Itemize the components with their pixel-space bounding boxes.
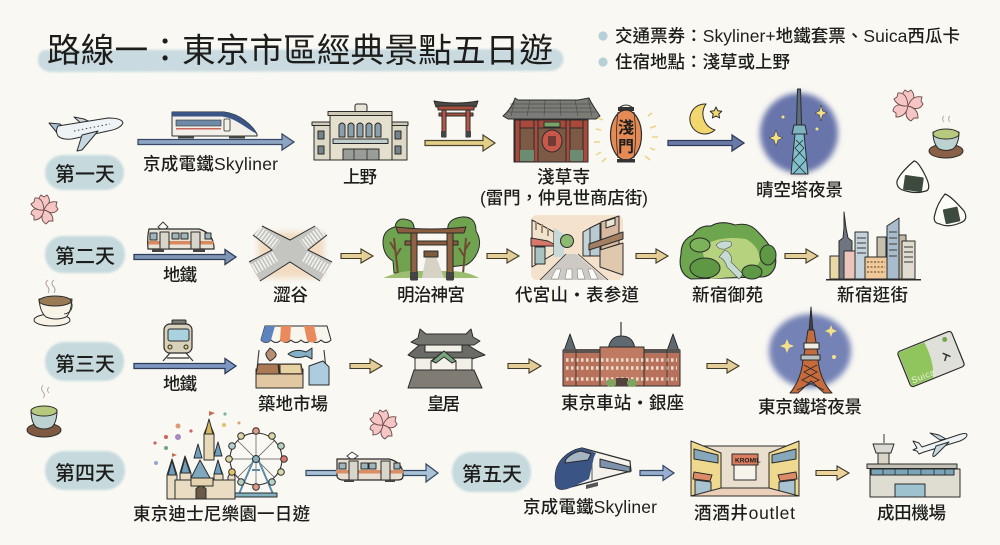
icon: airplane departing [913,433,967,456]
icon: Tokyo Skytree at night [760,89,838,174]
icon: green tea cup left [27,385,61,437]
icon: commuter train day 2 [148,222,214,252]
arrow: Skyliner to outlet [640,466,674,480]
arrow: day 3 metro [134,358,236,374]
day label: 第二天 [45,236,125,273]
day label: 第一天 [45,155,124,190]
arrow: Gyoen to Shinjuku [785,249,818,263]
icon: crescent moon and star [690,104,722,134]
label: 淺草寺: (雷門，仲見世商店街) [480,188,648,208]
icon: Kaminarimon gate [503,98,600,162]
day label: 第三天: 第三天 [55,353,115,376]
info list: 住宿地點：淺草或上野 [615,52,790,72]
label: 成田機場: 成田機場 [877,503,946,523]
icon: onigiri [897,161,929,192]
arrow: Tokyo Station to Tower [707,359,739,373]
arrow: day 2 metro [134,250,236,264]
icon: Ueno station [312,104,408,160]
icon: cherry blossom top right [893,90,923,121]
arrow: Daikanyama to Gyoen [636,249,668,263]
label: 淺草寺 [480,167,648,208]
arrow: airport to Ueno [138,134,294,150]
icon: Shisui outlet mall: KROMIL [735,458,761,464]
arrow: Tsukiji to Palace [350,359,382,373]
label: 地鐵 day 2: 地鐵 [163,265,198,285]
icon: cherry blossom centre [370,410,397,439]
day label: 第四天 [45,451,125,490]
icon: Shisui outlet mall [691,441,799,496]
icon: Tokyo Tower at night [769,307,851,393]
icon: torii gate [434,101,478,137]
label: 澀谷: 澀谷 [273,285,308,305]
label: 酒酒井outlet: 酒酒井outlet [694,503,795,523]
icon: Imperial Palace [408,329,485,388]
icon: green tea cup top right [929,116,963,158]
icon: commuter train day 4 [336,452,403,482]
day label: 第五天 [452,452,531,492]
day label: 第五天: 第五天 [462,463,522,486]
arrow: Ueno to Asakusa [425,135,495,151]
icon: Meiji shrine [383,217,480,280]
icon: onigiri with sesame [934,194,966,226]
arrow: Palace to Tokyo Station [508,359,541,373]
info list [598,26,960,72]
icon: Shinjuku Gyoen park [680,223,776,279]
icon: ferris wheel [226,428,287,497]
day label: 第一天: 第一天 [55,163,115,186]
label: 京成電鐵Skyliner day 5: 京成電鐵Skyliner [523,497,657,517]
label: 東京車站・銀座: 東京車站・銀座 [561,393,684,413]
label: 地鐵 day 3: 地鐵 [163,374,198,394]
arrow: Meiji to Daikanyama [487,249,519,263]
label: 明治神宮: 明治神宮 [397,285,465,305]
icon: Suica card: Suica [910,367,937,385]
label: 上野: 上野 [343,167,378,187]
icon: Skyliner train [172,112,257,138]
label: 東京鐵塔夜景: 東京鐵塔夜景 [758,397,862,417]
icon: Skyliner train front [555,448,631,489]
icon: red lantern: 門 [618,138,634,156]
icon: Suica card [897,331,965,387]
label: 晴空塔夜景: 晴空塔夜景 [756,180,843,200]
label: 皇居: 皇居 [427,394,460,414]
icon: Shibuya crossing [249,226,332,281]
icon: cherry blossom left [31,195,58,224]
arrow: Asakusa to Skytree [668,135,744,151]
icon: red lantern: 淺 [618,118,634,137]
icon: airplane day 1 [49,117,123,151]
day label: 第三天 [45,342,124,381]
arrow: Shibuya to Meiji [341,249,373,263]
label: 京成電鐵Skyliner: 京成電鐵Skyliner [143,154,278,174]
info list: 交通票券：Skyliner+地鐵套票、Suica西瓜卡 [615,26,960,46]
label: 淺草寺: 淺草寺 [537,167,590,187]
icon: Tsukiji market stall [256,326,331,388]
arrow: outlet to Narita [816,466,849,480]
icon: Tokyo Station [563,322,680,387]
day label: 第二天: 第二天 [55,245,115,268]
icon: metro train front [163,320,193,361]
label: 新宿御苑: 新宿御苑 [692,285,763,305]
icon: Daikanyama street [531,215,623,280]
icon: Disney castle [153,411,240,499]
label: 新宿逛街: 新宿逛街 [837,285,908,305]
icon: red lantern [594,105,658,162]
label: 東京迪士尼樂園一日遊: 東京迪士尼樂園一日遊 [133,504,310,524]
label: 築地市場: 築地市場 [258,394,328,414]
arrow: day 4 return [306,464,438,482]
icon: Narita airport [867,434,960,497]
icon: coffee cup [34,280,72,326]
day label: 第四天: 第四天 [55,462,115,485]
icon: Shinjuku skyline [826,212,921,280]
title: 路線一：東京市區經典景點五日遊 [47,32,553,70]
label: 代宮山・表参道: 代宮山・表参道 [515,285,640,305]
